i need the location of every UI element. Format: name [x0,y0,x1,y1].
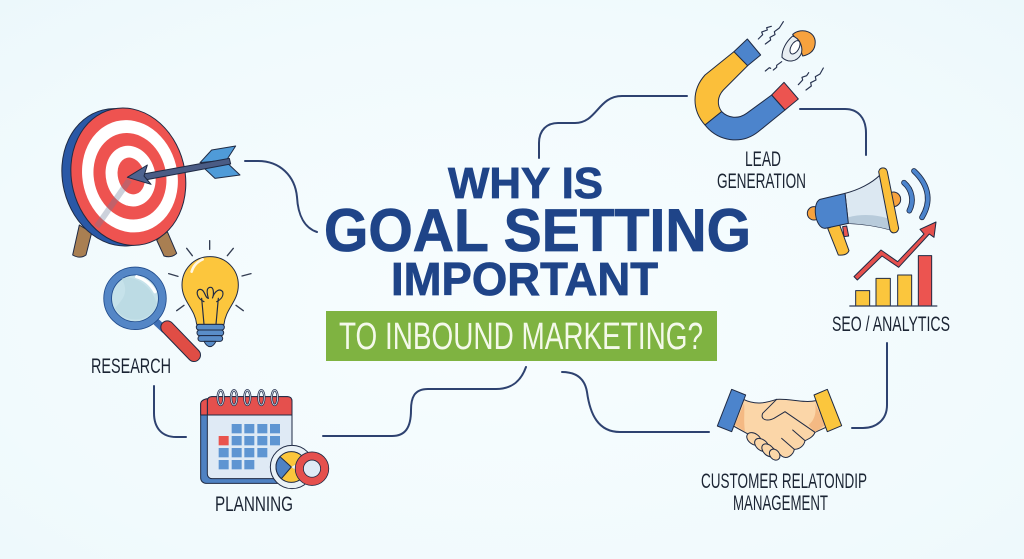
magnetic squiggles [758,22,823,90]
connector: target to title [245,161,317,232]
yellow cuff [814,389,842,432]
title line: why is: WHY IS [448,159,603,208]
connector: planning to title [323,367,526,436]
label: lead generation: LEAD [745,148,781,171]
label: planning: PLANNING [215,493,293,516]
baseline [849,304,937,308]
target back [48,96,191,258]
megaphone body [807,168,901,255]
bars [856,256,932,306]
icon: magnifier and light bulb [108,241,251,355]
icon: handshake [717,389,842,462]
blue cuff [717,389,746,432]
calendar rings [218,390,278,405]
attracted mouse [782,31,815,61]
icon: calendar with charts [201,390,325,489]
pie chart badge [270,445,314,489]
connector: customer relationship to title [562,372,709,432]
label: research: RESEARCH [91,355,171,378]
label: customer relationship management: CUSTOMER RELATONDIP [701,470,867,493]
growth arrow [854,222,936,280]
calendar body [201,397,292,483]
chart: rising bars with arrow [849,222,937,306]
magnifier [108,271,194,355]
label: lead generation: GENERATION [717,170,806,193]
ring badge [299,456,325,481]
label: lead generation [717,148,806,193]
sound waves [904,171,928,217]
label: seo analytics: SEO / ANALYTICS [832,313,950,336]
light bulb [169,241,251,347]
calendar date grid [219,424,280,469]
title line: goal setting: GOAL SETTING [324,197,751,264]
green banner [326,311,717,361]
label: customer relationship management: MANAGEMENT [733,492,828,515]
arrow shadow [97,180,129,227]
target legs [73,225,177,257]
magnet body [695,39,798,140]
icon: target with arrow [48,96,240,258]
green banner: TO INBOUND MARKETING? [339,316,703,358]
connector: lead generation to SEO [800,109,866,155]
icon: megaphone [807,168,928,255]
title block [324,159,751,361]
target face [57,96,200,258]
connector: title to lead generation [539,96,687,158]
icon: magnet [695,22,823,140]
connector: SEO to customer relationship [852,343,887,428]
arrow [127,146,240,184]
connector: research to planning [154,386,186,437]
title line: important: IMPORTANT [391,253,658,305]
hands [733,399,826,462]
label: customer relationship management [701,470,867,515]
